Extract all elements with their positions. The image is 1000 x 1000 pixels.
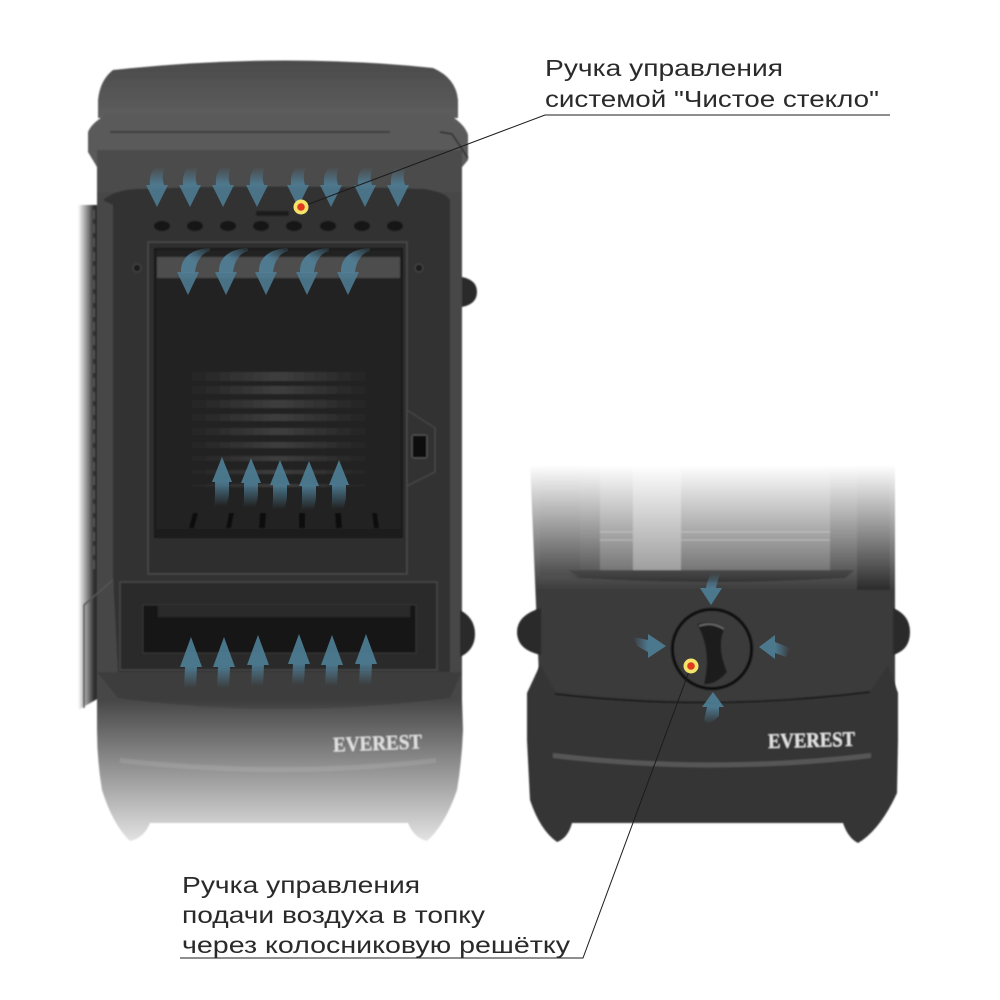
firebox interior	[155, 249, 402, 537]
label: glass cleaning control: Ручка управления	[545, 55, 783, 81]
air vent holes	[154, 221, 403, 231]
leader line: glass cleaning control	[301, 115, 890, 207]
glass strip	[157, 257, 400, 278]
grate slots	[189, 513, 379, 528]
dark front panel	[103, 186, 450, 672]
latch housing	[407, 410, 435, 486]
label: air supply control: подачи воздуха в топку	[182, 902, 486, 928]
main stove: front view with open door	[78, 60, 477, 841]
lid	[98, 60, 458, 118]
stove body	[97, 150, 463, 841]
collar	[87, 116, 469, 168]
airflow arrows: firebox upward	[212, 457, 349, 510]
label: air supply control	[182, 872, 571, 958]
label: glass cleaning control: системой "Чистое стекло"	[545, 86, 879, 112]
side knobs	[517, 608, 541, 655]
lower door hinge	[84, 580, 113, 708]
marker: glass cleaning control	[294, 200, 308, 214]
feet shading band	[120, 758, 436, 772]
airflow arrows around knob	[633, 573, 790, 724]
knob handle	[697, 622, 727, 684]
knob recess	[671, 608, 753, 690]
screws	[133, 264, 423, 272]
glass area	[600, 497, 830, 571]
slider slot	[256, 211, 289, 216]
detail stove lower body	[517, 608, 910, 843]
firebox door frame	[148, 242, 407, 574]
open door on the left	[78, 204, 98, 710]
marker: air supply control	[684, 658, 698, 674]
airflow arrows: glass wash curved	[177, 248, 370, 295]
label: air supply control: через колосниковую решётку	[182, 932, 571, 958]
airflow arrows: top row	[146, 167, 409, 207]
side handles	[462, 277, 477, 307]
lower band	[553, 753, 871, 768]
brand logo: EVEREST	[768, 727, 855, 753]
firebox ribs	[220, 372, 337, 488]
leader line: air supply control	[180, 666, 691, 958]
control panel	[636, 699, 784, 702]
label: glass cleaning control	[545, 55, 879, 112]
ash pan door	[120, 582, 437, 670]
label: air supply control: Ручка управления	[182, 872, 420, 898]
stove upper body	[530, 460, 895, 700]
detail stove: air control close-up	[530, 460, 895, 703]
base casting	[527, 665, 898, 843]
airflow arrows: ash pan upward	[180, 634, 377, 688]
brand logo: EVEREST	[333, 729, 422, 757]
